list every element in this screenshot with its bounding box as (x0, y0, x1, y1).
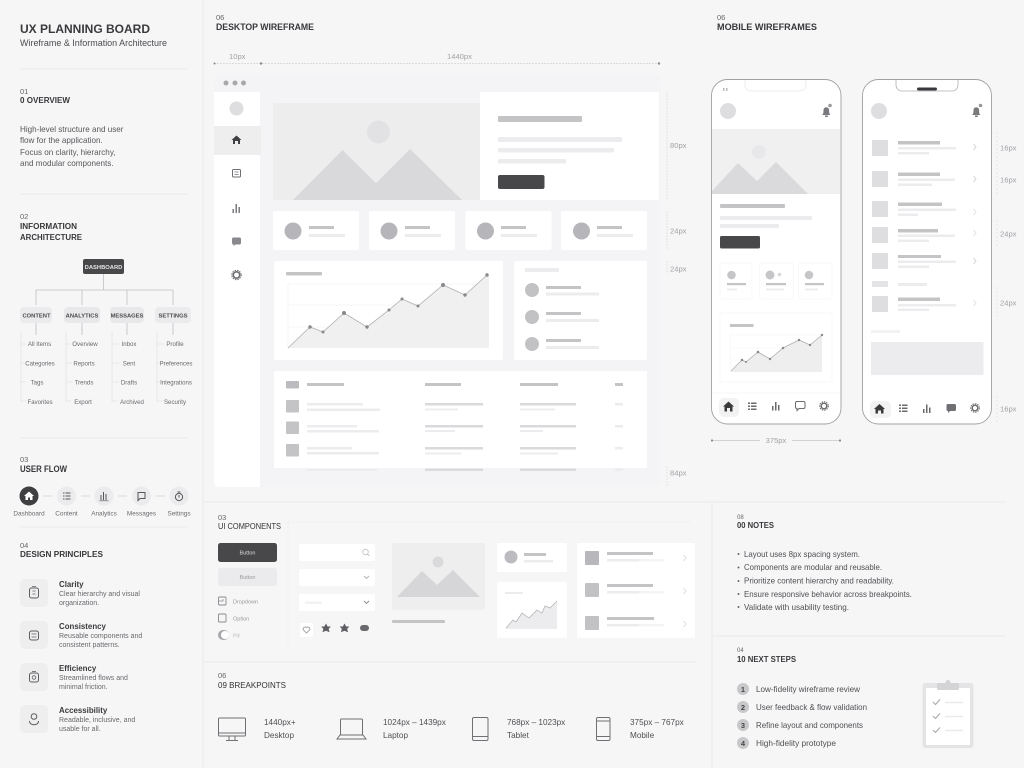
panel: information architecture: INFORMATION (20, 221, 77, 231)
panel: overview: High-level structure and user (20, 125, 124, 134)
icon: clipboard checklist (922, 680, 974, 748)
tree diagram: All Items (28, 341, 51, 348)
line chart card (274, 261, 503, 360)
panel: breakpoints: 375px – 767px (630, 718, 684, 727)
panel: user flow: Settings (167, 510, 191, 518)
tree diagram: Trends (75, 380, 93, 386)
panel: breakpoints: 1440px+ (264, 718, 296, 727)
panel: information architecture: 02 (20, 212, 28, 221)
dimensions: desktop vertical spacing: 84px (670, 468, 687, 478)
buttons (218, 543, 277, 586)
panel: next steps: User feedback & flow validation (756, 703, 867, 712)
dimensions: desktop vertical spacing (667, 92, 687, 487)
dimensions: desktop vertical spacing: 80px (670, 141, 687, 150)
panel: breakpoints: 1024px – 1439px (383, 718, 446, 727)
heading: desktop wireframe: DESKTOP WIREFRAME (216, 22, 314, 32)
heading: mobile wireframes: 06 (717, 13, 725, 22)
principle: efficiency (20, 663, 128, 691)
principle: efficiency: Efficiency (59, 664, 97, 673)
form inputs (299, 544, 375, 611)
dimension: mobile width (711, 436, 841, 445)
checkboxes and toggle: Option (233, 616, 249, 622)
principle: consistency: consistent patterns. (59, 642, 120, 649)
dimension: desktop width (214, 52, 660, 65)
panel: next steps: 4 (741, 739, 746, 748)
panel: user flow: USER FLOW (20, 464, 67, 474)
title: UX PLANNING BOARD (20, 22, 150, 36)
dimensions: desktop vertical spacing: 24px (670, 226, 687, 236)
dimensions: desktop vertical spacing: 24px (670, 264, 687, 274)
panel: overview (20, 87, 124, 168)
panel: overview: Focus on clarity, hierarchy, (20, 148, 116, 157)
icon: desktop monitor (218, 718, 246, 740)
buttons: Button (240, 575, 255, 581)
panel: next steps (737, 648, 974, 749)
tree diagram: Export (74, 399, 92, 406)
icon buttons (300, 623, 369, 637)
panel: user flow: Analytics (91, 510, 117, 518)
dimensions: mobile vertical spacing (997, 132, 1017, 424)
principle: clarity (20, 579, 140, 607)
dimensions: mobile vertical spacing: 24px (1000, 298, 1017, 308)
icon: laptop (337, 719, 366, 739)
panel: user flow: Content (55, 510, 78, 518)
panel: next steps: 2 (741, 703, 745, 712)
tree diagram: Preferences (160, 360, 192, 368)
principle: consistency (20, 621, 142, 649)
stat cards (273, 211, 647, 250)
heading: mobile wireframes (717, 13, 817, 32)
tree diagram: ANALYTICS (66, 314, 98, 320)
principle: accessibility: usable for all. (59, 726, 101, 733)
panel: user flow: Messages (127, 510, 156, 518)
panel: notes: 08 (737, 515, 744, 521)
panel: information architecture (20, 212, 192, 406)
panel: information architecture: ARCHITECTURE (20, 232, 82, 242)
title (20, 22, 167, 48)
heading: mobile wireframes: MOBILE WIREFRAMES (717, 22, 817, 32)
panel: breakpoints: 768px – 1023px (507, 718, 565, 727)
dimensions: mobile vertical spacing: 16px (1000, 176, 1017, 184)
principle: clarity: Clarity (59, 580, 84, 589)
panel: overview: and modular components. (20, 159, 114, 168)
tree diagram: Tags (31, 380, 43, 386)
panel: UI components: 03 (218, 513, 226, 522)
bottom navigation (870, 401, 979, 418)
profile card (497, 543, 567, 572)
checkboxes and toggle (218, 597, 258, 640)
panel: UI components (218, 513, 695, 650)
panel: breakpoints: Mobile (630, 731, 655, 740)
principle: consistency: Reusable components and (59, 633, 142, 640)
panel: notes: Prioritize content hierarchy and readability. (744, 576, 894, 586)
icon: mobile (596, 718, 610, 740)
principle: clarity: organization. (59, 600, 99, 607)
buttons: Button (240, 550, 255, 556)
panel: next steps: Refine layout and components (756, 721, 863, 730)
panel: next steps: High-fidelity prototype (756, 739, 836, 748)
tree diagram: Sent (123, 360, 136, 368)
mini chart card (497, 582, 567, 638)
tree diagram: Reports (73, 360, 95, 368)
principle: efficiency: minimal friction. (59, 684, 108, 691)
panel: overview: 01 (20, 87, 28, 96)
stat tiles (720, 263, 832, 299)
tree diagram: Favorites (27, 399, 53, 406)
panel: user flow: 03 (20, 455, 28, 464)
hero image (273, 103, 480, 200)
image placeholder (392, 543, 485, 623)
window controls (224, 80, 246, 86)
panel: overview: 0 OVERVIEW (20, 95, 71, 105)
notch (745, 80, 806, 91)
tree diagram: DASHBOARD (85, 265, 122, 271)
panel: breakpoints: Laptop (383, 731, 408, 740)
title: Wireframe & Information Architecture (20, 38, 167, 48)
dimension: mobile width: 375px (766, 436, 787, 445)
image placeholder block (871, 342, 984, 375)
panel: design principles: DESIGN PRINCIPLES (20, 549, 103, 559)
panel: next steps: 3 (741, 721, 745, 730)
principle: accessibility: Accessibility (59, 706, 108, 715)
hero text panel (480, 92, 659, 200)
tree diagram: Security (164, 399, 187, 406)
bottom navigation (712, 393, 840, 417)
panel: breakpoints (218, 671, 684, 740)
panel: notes: Ensure responsive behavior across breakpoints. (744, 590, 912, 599)
heading: desktop wireframe (216, 13, 314, 32)
panel: mobile wireframe 2 (862, 80, 992, 424)
panel: next steps: Low-fidelity wireframe review (756, 685, 860, 694)
principle: consistency: Consistency (59, 622, 107, 631)
list card (577, 543, 695, 638)
panel: breakpoints: Tablet (507, 731, 530, 740)
panel: mobile wireframe 1 (712, 80, 841, 424)
principle: accessibility: Readable, inclusive, and (59, 717, 135, 724)
tree diagram: Categories (25, 360, 55, 368)
panel: next steps: 1 (741, 685, 745, 694)
dimension: desktop width: 1440px (447, 52, 472, 61)
icon: bell (972, 104, 982, 117)
panel: UI components: UI COMPONENTS (218, 521, 281, 531)
panel: notes (737, 515, 912, 612)
panel: next steps: 10 NEXT STEPS (737, 654, 796, 664)
tree diagram: MESSAGES (111, 314, 144, 320)
checkboxes and toggle: Pill (233, 634, 240, 640)
panel: breakpoints: 06 (218, 671, 226, 680)
panel: notes: Validate with usability testing. (744, 603, 849, 612)
panel: user flow (13, 455, 191, 518)
tree diagram: Inbox (122, 341, 136, 348)
tree diagram: Profile (166, 341, 184, 348)
line chart (720, 313, 832, 382)
button (720, 236, 760, 248)
principle: clarity: Clear hierarchy and visual (59, 591, 140, 598)
tree diagram: Archived (120, 399, 144, 406)
panel: next steps: 04 (737, 648, 744, 654)
tree diagram: Integrations (160, 380, 192, 386)
dimension: desktop width: 10px (229, 52, 246, 61)
panel: notes: Layout uses 8px spacing system. (744, 550, 860, 559)
icon: bell (822, 104, 832, 117)
panel: breakpoints: 09 BREAKPOINTS (218, 680, 286, 690)
principle: accessibility (20, 705, 135, 733)
panel: notes: Components are modular and reusable. (744, 563, 882, 572)
panel: notes: 00 NOTES (737, 520, 774, 530)
checkboxes and toggle: Dropdown (233, 600, 258, 606)
tree diagram: Drafts (121, 380, 137, 386)
heading: desktop wireframe: 06 (216, 13, 224, 22)
tree diagram: Overview (72, 341, 98, 348)
sidebar (214, 92, 261, 487)
list rows (872, 140, 976, 312)
data table card (274, 371, 647, 471)
icon: tablet (472, 718, 488, 740)
activity list card (514, 261, 647, 360)
panel: user flow: Dashboard (13, 510, 45, 518)
dimensions: mobile vertical spacing: 16px (1000, 404, 1017, 414)
notch (896, 80, 958, 91)
panel: desktop wireframe (214, 75, 660, 487)
panel: overview: flow for the application. (20, 136, 103, 145)
tree diagram: SETTINGS (158, 314, 188, 320)
dimensions: mobile vertical spacing: 24px (1000, 230, 1017, 238)
panel: design principles (20, 541, 142, 733)
hero image (712, 129, 840, 194)
tree diagram (20, 259, 192, 406)
dimensions: mobile vertical spacing: 16px (1000, 144, 1017, 152)
tree diagram: CONTENT (22, 314, 51, 320)
panel: design principles: 04 (20, 541, 28, 550)
panel: breakpoints: Desktop (264, 731, 294, 740)
principle: efficiency: Streamlined flows and (59, 675, 128, 682)
